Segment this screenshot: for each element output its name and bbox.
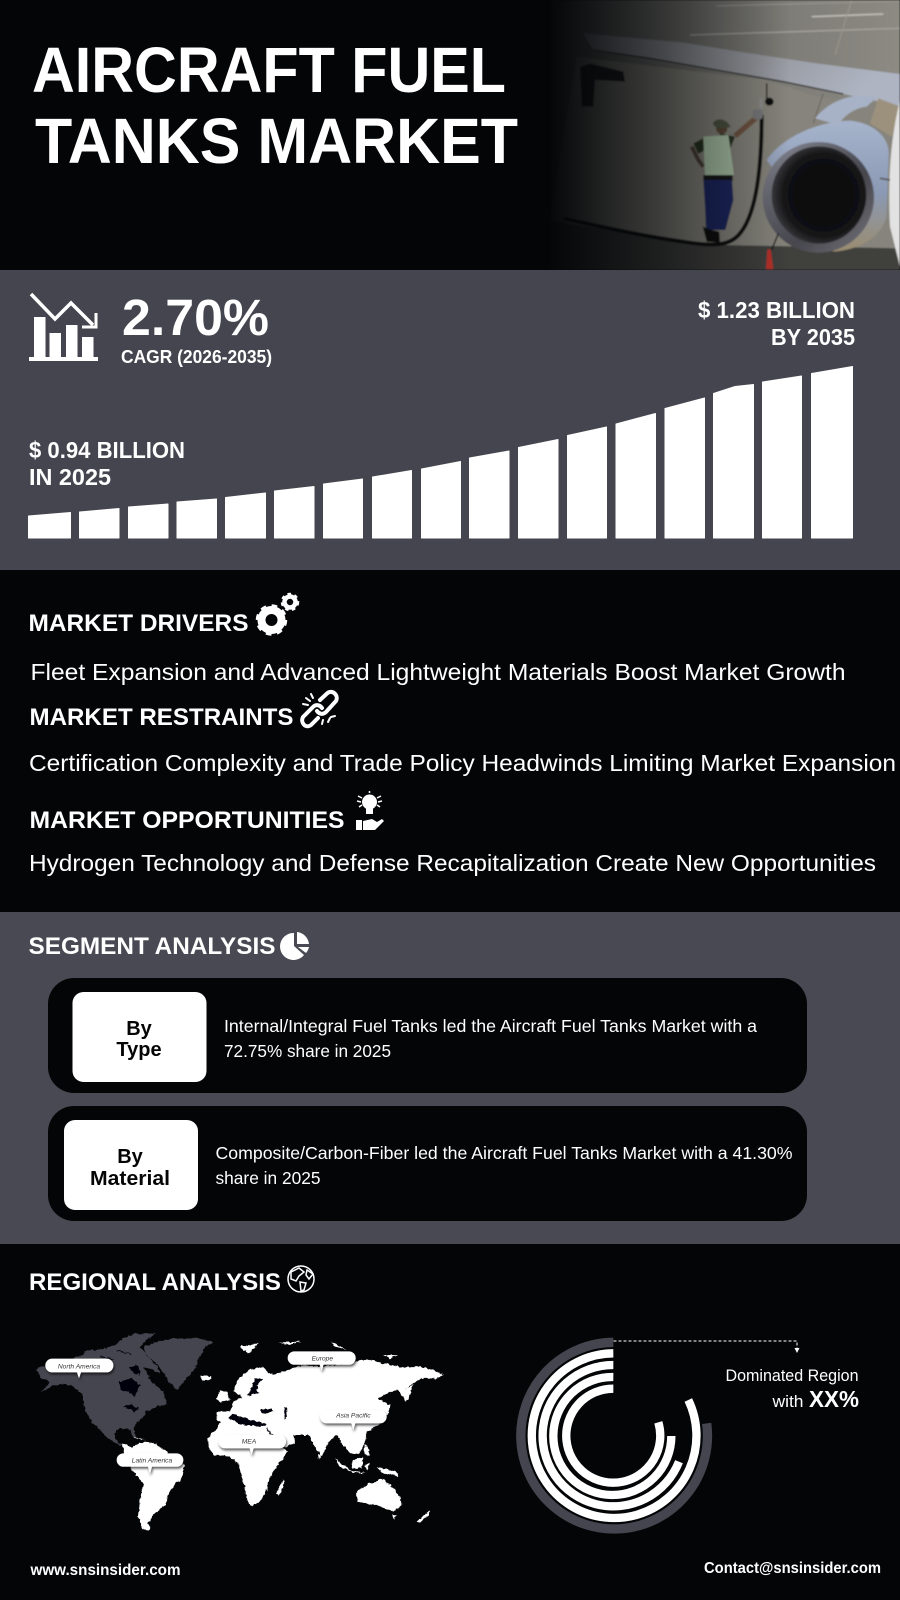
footer website: www.snsinsider.com: [30, 1562, 181, 1579]
heading: market opportunities: MARKET OPPORTUNITIES: [30, 807, 344, 834]
callout: MEA: [218, 1435, 286, 1455]
CAGR value: 2.70%: [122, 289, 269, 346]
title: TANKS MARKET: [35, 105, 518, 177]
card: by type: [48, 978, 807, 1093]
heading: market restraints: MARKET RESTRAINTS: [30, 704, 294, 731]
world map: [36, 1333, 444, 1530]
icon: pie chart: [280, 932, 309, 960]
bar chart: [28, 366, 852, 538]
text: restraints: Certification Complexity and Trade Policy Headwinds Limiting Market Expansion: [29, 750, 896, 776]
callout: Europe: [288, 1351, 356, 1371]
text: by material finding: Composite/Carbon-Fiber led the Aircraft Fuel Tanks Market with a 41.30%: [216, 1143, 792, 1163]
label box: by material: [64, 1120, 198, 1210]
text: by material finding: [216, 1143, 792, 1188]
Eurasia, Africa, South America and islands: [122, 1342, 444, 1530]
icon: broken chain: [302, 692, 337, 726]
panel: segment analysis: [0, 912, 900, 1244]
dominated region callout: XX%: [809, 1386, 859, 1412]
header panel: [32, 0, 900, 270]
text: by material finding: share in 2025: [216, 1168, 320, 1188]
callout: Asia Pacific: [320, 1410, 387, 1430]
icon: globe: [288, 1266, 314, 1292]
card: by material: [48, 1106, 807, 1221]
North America region: [36, 1333, 213, 1446]
text: by type finding: 72.75% share in 2025: [224, 1041, 391, 1061]
arrow: dashed leader: [614, 1341, 800, 1353]
forecast value label: BY 2035: [771, 324, 855, 350]
dominated region callout: [726, 1366, 859, 1412]
label box: by type: By: [126, 1018, 153, 1040]
text: by type finding: Internal/Integral Fuel Tanks led the Aircraft Fuel Tanks Market with a: [224, 1016, 757, 1036]
base value label: IN 2025: [29, 464, 111, 490]
heading: segment analysis: SEGMENT ANALYSIS: [28, 933, 276, 960]
forecast value label: $ 1.23 BILLION: [698, 297, 855, 323]
label box: by material: By: [117, 1146, 144, 1168]
photo: aircraft being refuelled: [540, 0, 900, 270]
callout: MEA: MEA: [242, 1438, 257, 1445]
panel: market size: [0, 270, 900, 570]
text: by type finding: [224, 1016, 757, 1061]
callout: North America: [45, 1359, 113, 1378]
callout: Asia Pacific: Asia Pacific: [335, 1413, 371, 1420]
forecast value label: [698, 297, 855, 350]
heading: market drivers: MARKET DRIVERS: [28, 610, 248, 637]
CAGR label: CAGR (2026-2035): [121, 346, 272, 367]
panel: market dynamics: [0, 570, 900, 912]
base value label: $ 0.94 BILLION: [29, 437, 185, 463]
dominated region callout: Dominated Region: [726, 1366, 858, 1385]
callout: North America: North America: [58, 1363, 100, 1370]
label box: by material: Material: [90, 1168, 170, 1190]
base value label: [29, 437, 185, 490]
title: AIRCRAFT FUEL: [32, 34, 506, 106]
panel: regional analysis: [0, 1244, 900, 1600]
heading: regional analysis: REGIONAL ANALYSIS: [29, 1269, 281, 1296]
callout: Europe: Europe: [312, 1355, 333, 1362]
text: drivers: Fleet Expansion and Advanced Lightweight Materials Boost Market Growth: [30, 659, 846, 685]
callout: Latin America: Latin America: [132, 1458, 173, 1465]
dominated region callout: with: [771, 1392, 804, 1411]
title: [32, 34, 518, 177]
icon: hand with light bulb: [356, 791, 384, 830]
callout: Latin America: [117, 1453, 183, 1474]
text: opportunities: Hydrogen Technology and Defense Recapitalization Create New Opportunities: [29, 850, 876, 876]
icon: chart with arrow: [29, 294, 98, 361]
label box: by type: Type: [116, 1039, 162, 1061]
label box: by type: [72, 992, 206, 1082]
radial chart: [521, 1342, 707, 1529]
footer contact: Contact@snsinsider.com: [704, 1560, 881, 1577]
icon: gears: [258, 594, 298, 634]
